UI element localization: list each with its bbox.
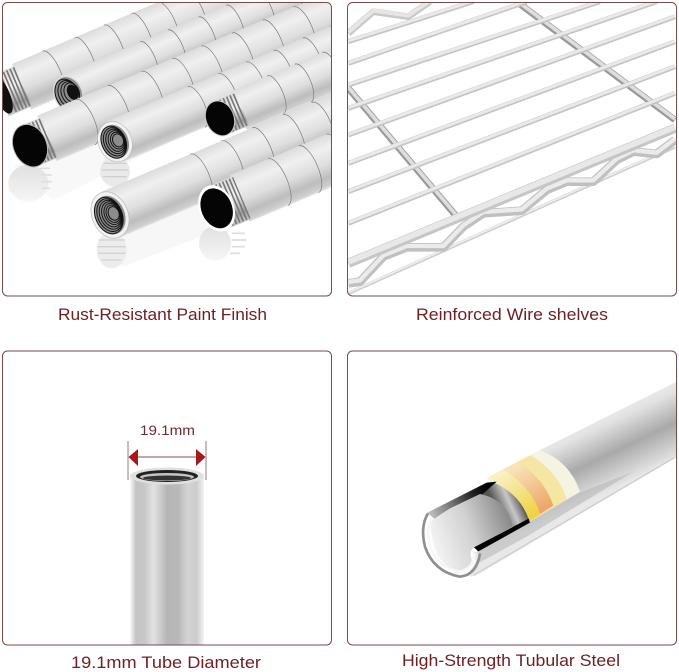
backing shade between tubes [244,94,331,130]
panel frame: rust-resistant paint finish [2,2,332,296]
dimension marker with arrows [128,441,206,480]
tube: second row open end [53,3,302,106]
tube: back row threaded end [3,3,231,116]
panel: reinforced wire shelf photo [348,1,675,293]
outer steel tube [473,382,677,573]
inner cutaway face [423,482,530,577]
dimension label: 19.1mm [140,423,195,438]
tube: front open end [90,98,331,239]
tube: front threaded end [198,132,331,232]
lower outer shell [467,455,677,576]
tube: middle open end [98,26,331,162]
panel frame: reinforced wire shelves [348,2,676,296]
cross bars [348,1,675,217]
panel frame: tube diameter [2,351,332,645]
caption: rust-resistant paint finish: Rust-Resistant Paint Finish [58,305,267,324]
lower rail [348,146,675,293]
panel: tube diameter illustration [128,423,206,647]
panel frame: tubular steel [348,351,676,645]
tube: middle left threaded end [12,3,331,168]
vertical tube body [130,468,204,647]
top zigzag support [348,1,430,33]
panel: rust-resistant paint finish photo [3,3,331,268]
front rail [348,127,675,263]
long shelf wires [348,1,675,223]
coating layer bands [480,450,580,529]
caption: tube diameter: 19.1mm Tube Diameter [71,653,261,672]
panel: tubular steel cutaway illustration [423,382,677,577]
reflections of tube ends [8,158,247,268]
tube: middle right threaded end [205,52,331,136]
zigzag truss [348,139,675,283]
caption: high-strength tubular steel: High-Strength Tubular Steel [402,651,620,670]
caption: reinforced wire shelves: Reinforced Wire shelves [416,305,608,324]
